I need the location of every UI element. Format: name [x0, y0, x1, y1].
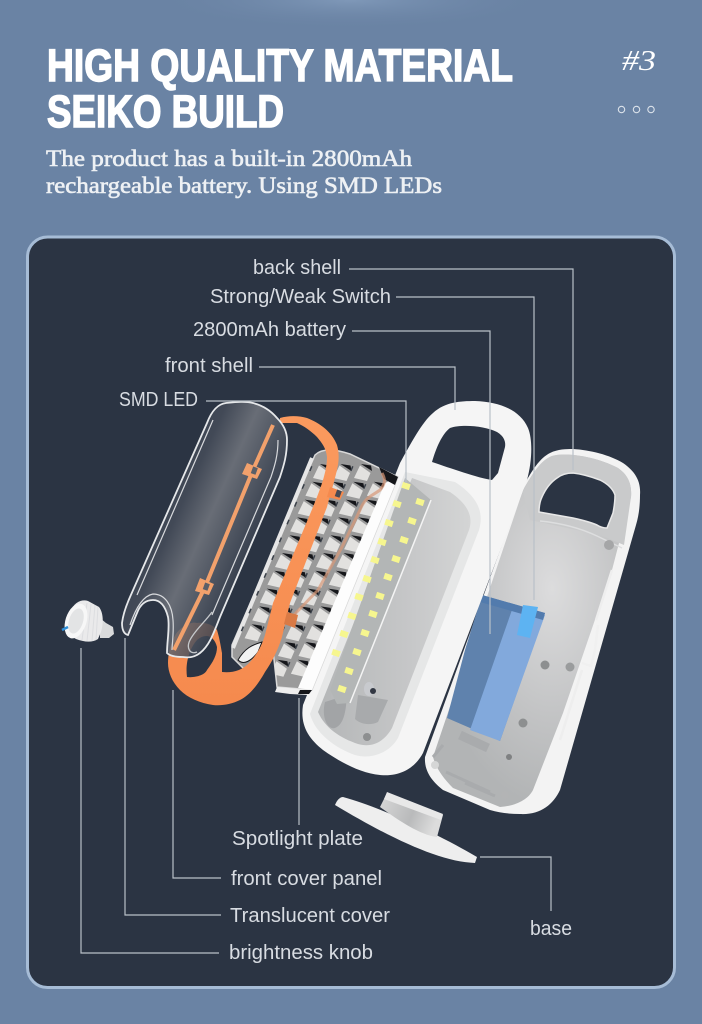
label: Strong/Weak Switch: Strong/Weak Switch	[210, 286, 391, 308]
label: front shell: front shell	[165, 355, 253, 377]
leader line: base	[480, 857, 551, 911]
LED board	[330, 478, 431, 704]
page number: #3	[622, 45, 656, 77]
label: SMD LED: SMD LED	[119, 389, 198, 411]
label: battery: 2800mAh battery	[193, 319, 346, 341]
leader line: back shell	[349, 269, 573, 470]
subtitle: The product has a built-in 2800mAh	[46, 146, 413, 171]
leader line: SMD LED	[206, 401, 406, 483]
thin orange strip with tabs	[174, 425, 273, 650]
title	[47, 40, 513, 137]
label: Translucent cover: Translucent cover	[230, 905, 390, 927]
dark panel	[28, 237, 674, 988]
battery	[447, 595, 545, 741]
leader line: front shell	[259, 367, 455, 410]
leader line: front cover panel	[173, 690, 221, 878]
subtitle	[46, 146, 442, 198]
label: back shell: back shell	[253, 257, 341, 279]
leader line: spotlight plate	[298, 698, 300, 825]
label: brightness knob: brightness knob	[229, 942, 373, 964]
spotlight plate	[232, 450, 398, 695]
front cover panel	[168, 416, 344, 705]
plate white rim	[298, 477, 398, 690]
battery switch	[517, 605, 538, 638]
subtitle: rechargeable battery. Using SMD LEDs	[46, 173, 442, 198]
three dots	[618, 106, 654, 113]
leader line: switch	[396, 297, 534, 600]
leader line: translucent cover	[125, 638, 221, 915]
handle frame	[523, 454, 631, 545]
translucent cover	[122, 402, 287, 657]
leader line: battery	[352, 331, 490, 634]
label: front cover panel: front cover panel	[231, 868, 382, 890]
back shell	[425, 449, 640, 814]
label: Spotlight plate: Spotlight plate	[232, 828, 363, 850]
front shell	[302, 401, 531, 775]
base	[335, 792, 477, 863]
title: HIGH QUALITY MATERIAL	[47, 40, 513, 91]
handle hole	[539, 473, 615, 528]
leader line: brightness knob	[81, 648, 219, 953]
plate chrome corner	[238, 642, 262, 662]
label: base: base	[530, 918, 572, 940]
title: SEIKO BUILD	[47, 86, 284, 137]
brightness knob	[60, 600, 114, 642]
